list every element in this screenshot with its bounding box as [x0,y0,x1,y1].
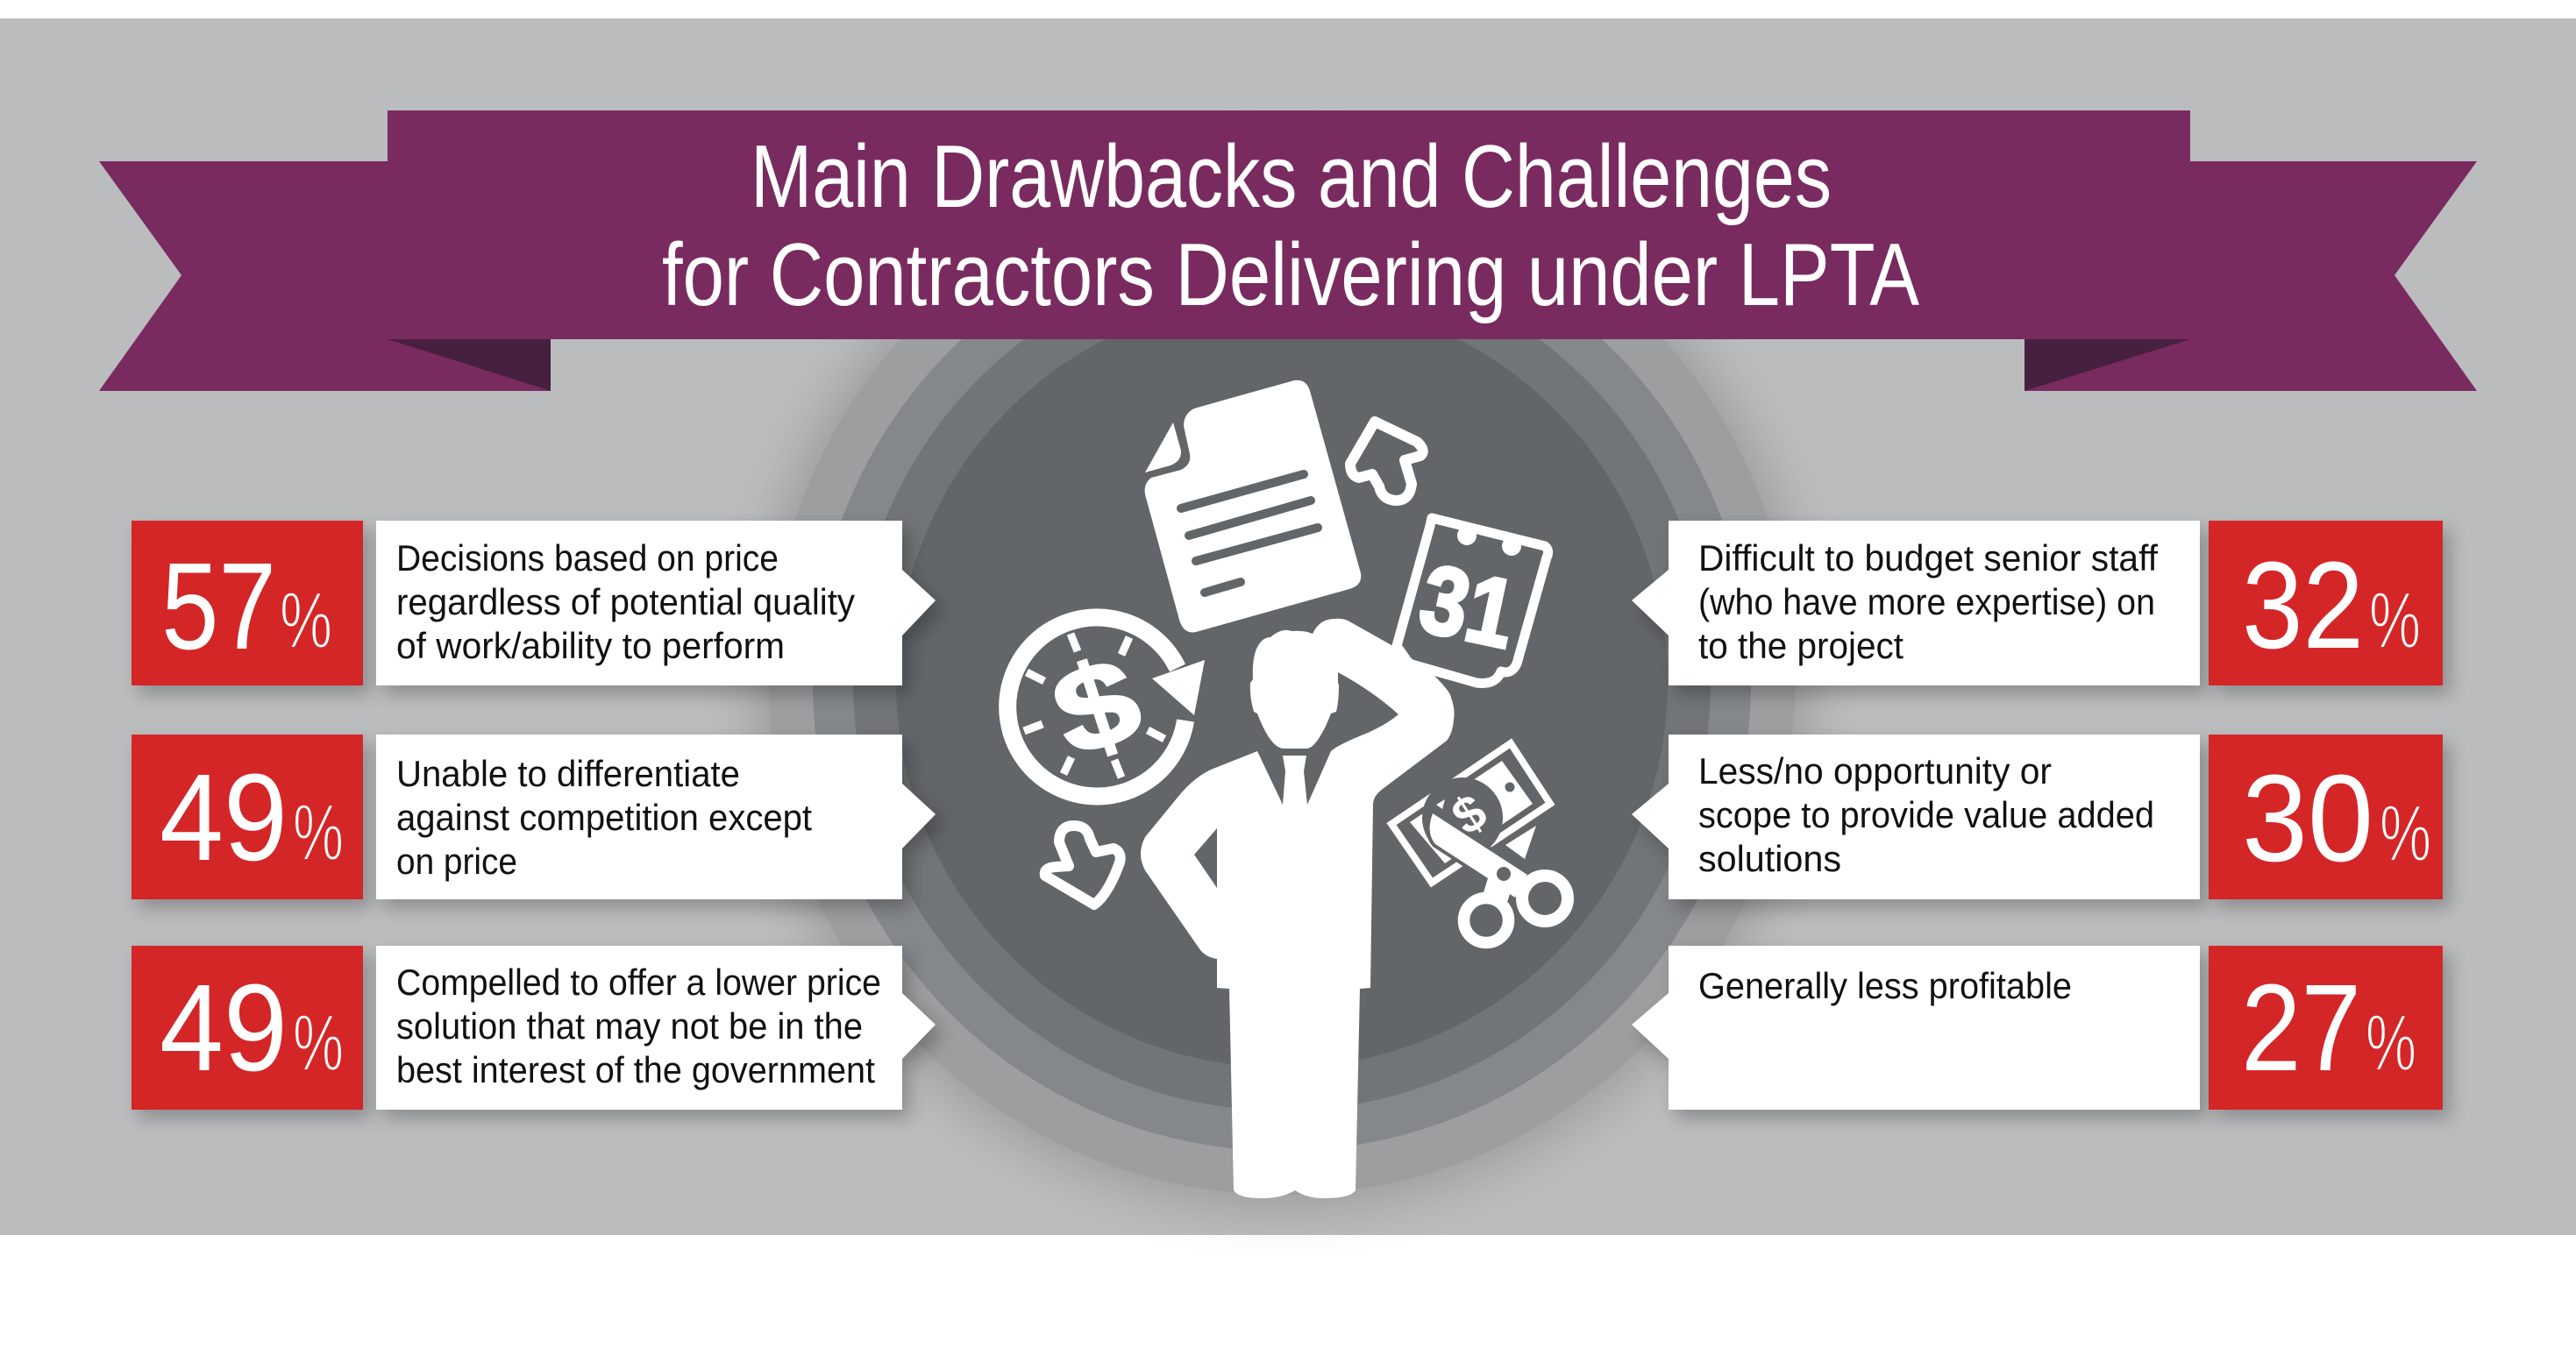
stat box: 32%: 32 [2242,536,2364,674]
stat box: 32% [2209,521,2450,694]
stat row 3 left [132,946,943,1118]
stat row 1 left [132,521,943,694]
callout: 49% differentiate text [376,735,943,908]
stat box: 49% [132,735,370,908]
stat box: 27%: 27 [2241,958,2361,1097]
stat box: 49% [132,946,370,1118]
stat box: 27% [2209,946,2450,1118]
callout: 49% differentiate text: against competition except [396,797,812,838]
callout: 57% text: of work/ability to perform [396,625,785,666]
title text: for Contractors Delivering under LPTA [662,226,1920,324]
figure: business man silhouette [1141,619,1455,1198]
callout: 32% text: Difficult to budget senior staff [1698,537,2158,579]
stat row 1 right [1632,521,2450,694]
stat box: 27%: % [2366,999,2416,1088]
stat box: 57%: % [280,577,332,665]
callout: 49% differentiate text: on price [396,841,517,882]
callout: 57% text: Decisions based on price [396,537,779,579]
callout: 57% text [376,521,943,694]
icon: dollar clock [1007,617,1205,796]
callout: 57% text: regardless of potential quality [396,581,855,622]
title text: Main Drawbacks and Challenges [751,128,1832,226]
icon: up arrow [1350,422,1423,500]
stat box: 30%: % [2380,790,2431,878]
icon: down arrow [1045,826,1121,905]
icon: dollar clock: $ [1037,630,1156,782]
stat row 2 left [132,735,943,908]
stat box: 49%: % [293,789,344,877]
callout: 32% text [1632,521,2207,694]
callout: 30% text: solutions [1698,838,1841,879]
stat box: 49%: 49 [160,748,288,886]
stat box: 57% [132,521,370,694]
callout: 49% lower price text: best interest of the government [396,1049,875,1090]
callout: 49% differentiate text: Unable to differentiate [396,753,740,794]
callout: 27% text [1632,946,2207,1118]
callout: 32% text: to the project [1698,625,1904,666]
callout: 49% lower price text: Compelled to offer a lower price [396,962,881,1003]
concentric circles backdrop [756,156,1808,1208]
callout: 49% lower price text: solution that may not be in the [396,1005,863,1047]
icon: calendar: 31 [1412,544,1525,669]
scissors [1430,813,1568,943]
callout: 30% text: scope to provide value added [1698,794,2154,835]
callout: 27% text: Generally less profitable [1698,965,2072,1006]
stat box: 30% [2209,735,2450,908]
icon: document [1145,380,1361,632]
stat row 2 right [1632,735,2450,908]
icon: calendar [1397,518,1548,683]
stat box: 49%: % [293,999,344,1088]
stat box: 32%: % [2369,577,2421,665]
callout: 30% text: Less/no opportunity or [1698,750,2052,792]
callout: 49% lower price text [376,946,943,1118]
stat box: 30%: 30 [2242,749,2373,887]
title ribbon [99,110,2477,391]
stat box: 49%: 49 [160,958,288,1097]
icon: money and scissors: $ [1442,783,1497,846]
callout: 30% text [1632,735,2207,908]
stat row 3 right [1632,946,2450,1118]
stat box: 57%: 57 [161,536,276,675]
title text [662,128,1920,324]
icon: money and scissors [1391,743,1568,943]
callout: 32% text: (who have more expertise) on [1698,581,2155,622]
